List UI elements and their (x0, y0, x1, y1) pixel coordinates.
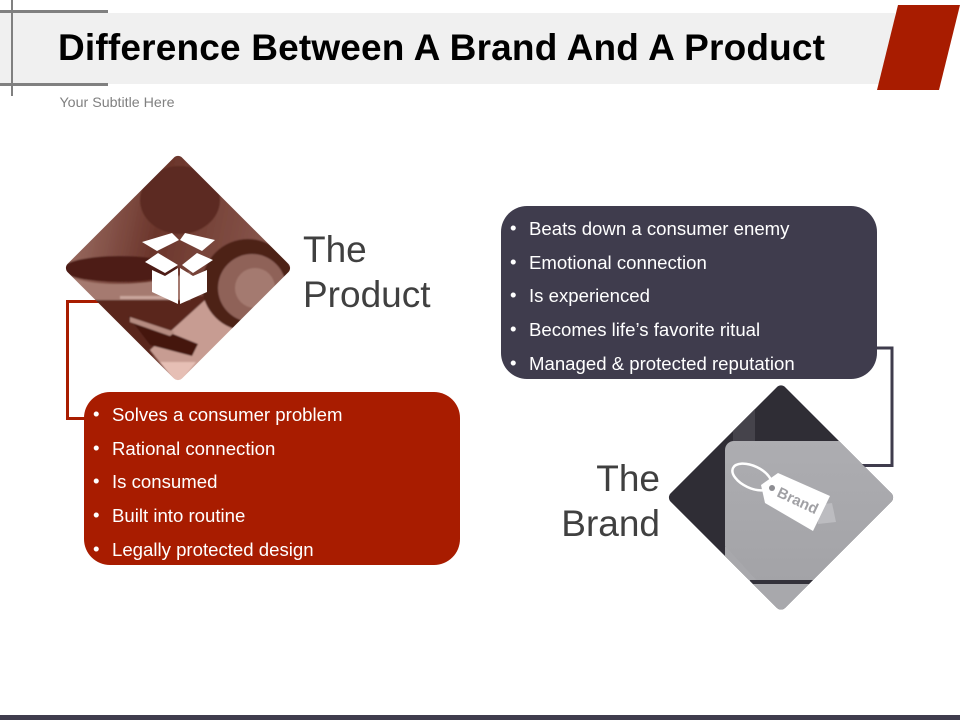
list: product bullets: • (93, 504, 100, 525)
list: product bullets (93, 403, 342, 560)
title: Difference Between A Brand And A Product (58, 27, 825, 68)
heading: the brand: The (596, 458, 660, 499)
subtitle: Your Subtitle Here (60, 94, 175, 110)
list: product bullets: Rational connection (112, 438, 275, 459)
list: product bullets: • (93, 470, 100, 491)
list: brand bullets: • (510, 217, 517, 238)
heading: the product: The (303, 229, 367, 270)
heading: the brand: Brand (561, 503, 660, 544)
list: brand bullets: • (510, 251, 517, 272)
icon: brand tag: Brand (774, 484, 821, 518)
list: product bullets: • (93, 437, 100, 458)
photo: laptop edge (750, 580, 814, 584)
list: product bullets: Is consumed (112, 471, 217, 492)
list: product bullets: Solves a consumer problem (112, 404, 342, 425)
connector: product (68, 302, 100, 418)
list: brand bullets: Becomes life’s favorite ritual (529, 319, 760, 340)
connector: brand (860, 348, 892, 466)
photo: painted scene (66, 156, 290, 380)
list: product bullets: Legally protected design (112, 539, 314, 560)
header band (0, 13, 895, 84)
heading: the product: Product (303, 274, 431, 315)
icon: open box (142, 233, 215, 304)
icon: brand tag (728, 458, 830, 531)
list: product bullets: Built into routine (112, 505, 245, 526)
list: brand bullets: Is experienced (529, 285, 650, 306)
list: brand bullets: • (510, 284, 517, 305)
list: brand bullets: Managed & protected reputation (529, 353, 795, 374)
panel: brand image diamond (668, 385, 894, 610)
list: brand bullets: Emotional connection (529, 252, 707, 273)
list: brand bullets: • (510, 318, 517, 339)
list: brand bullets: • (510, 352, 517, 373)
header crosshair lines (0, 0, 108, 96)
photo: logo shadow (818, 503, 836, 524)
panel: product image diamond (66, 156, 290, 380)
list: product bullets: • (93, 538, 100, 559)
footer bar (0, 715, 960, 720)
photo: dark background (668, 385, 894, 610)
photo: laptop (725, 441, 900, 582)
list: product bullets: • (93, 403, 100, 424)
panel: brand list (501, 206, 877, 379)
list: brand bullets: Beats down a consumer enemy (529, 218, 790, 239)
list: brand bullets (510, 217, 795, 374)
red accent parallelogram (877, 5, 960, 90)
panel: product list (84, 392, 460, 565)
